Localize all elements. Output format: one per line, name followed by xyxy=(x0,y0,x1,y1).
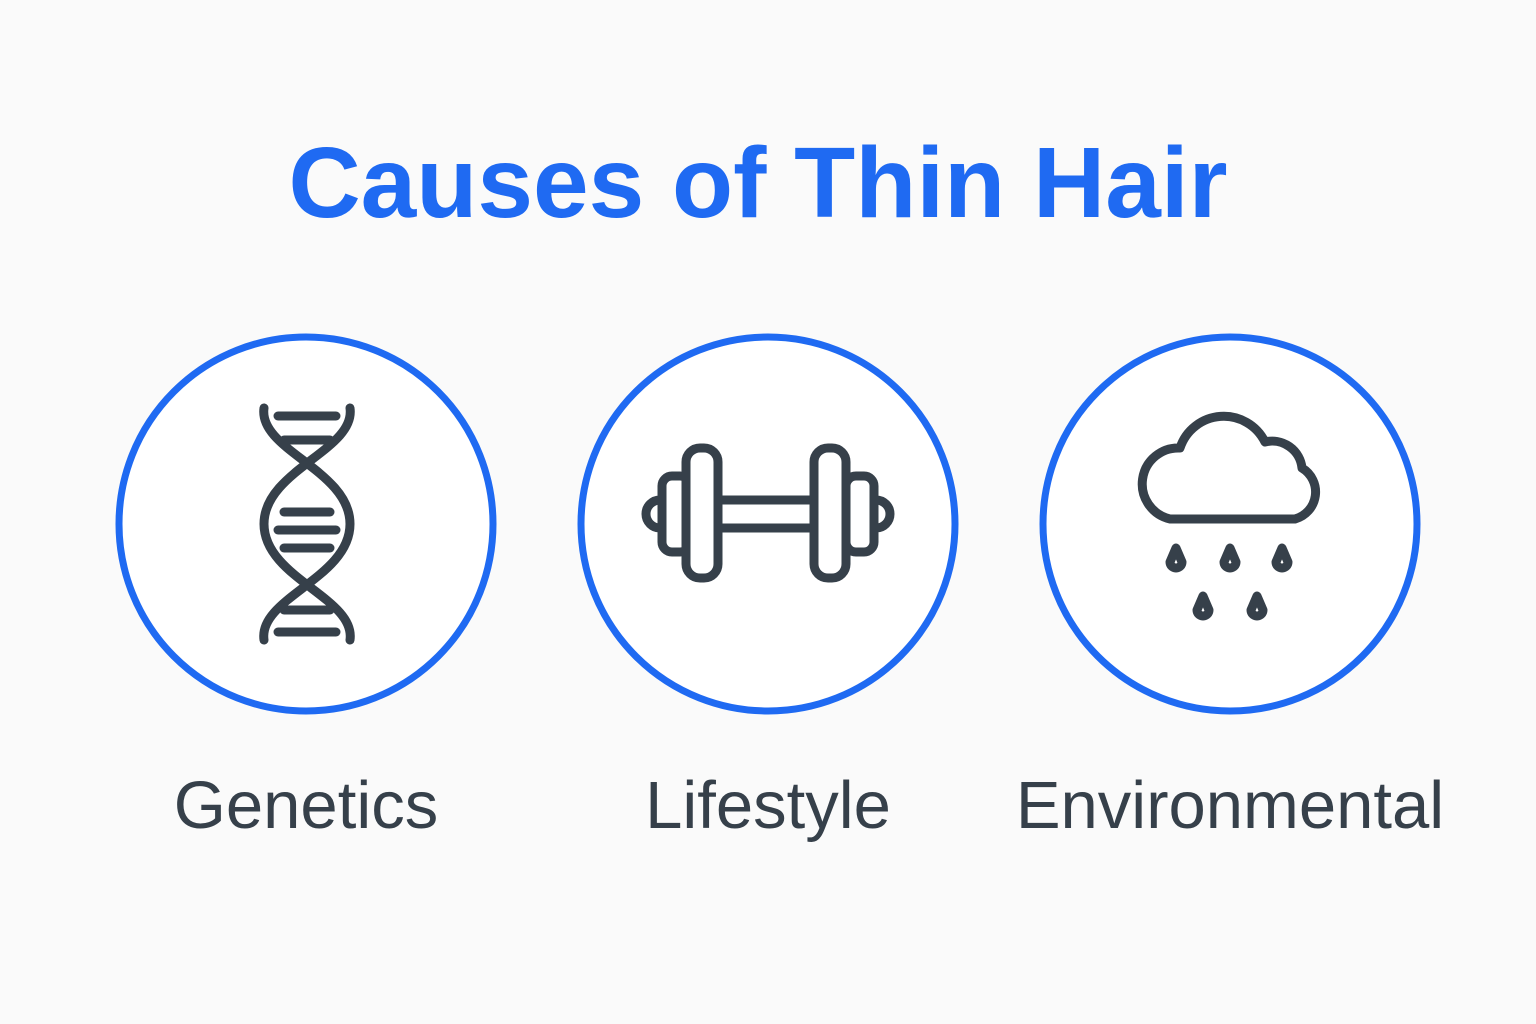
panel: environmental xyxy=(1016,337,1444,843)
title: Causes of Thin Hair xyxy=(288,127,1228,239)
panel: genetics xyxy=(119,337,493,843)
icon: dumbbell xyxy=(646,448,890,578)
panel: lifestyle xyxy=(581,337,955,843)
label: environmental: Environmental xyxy=(1016,768,1444,843)
icon: rain cloud xyxy=(1142,416,1316,616)
icon: dna xyxy=(264,408,350,640)
label: genetics: Genetics xyxy=(174,768,438,843)
label: lifestyle: Lifestyle xyxy=(645,768,891,843)
